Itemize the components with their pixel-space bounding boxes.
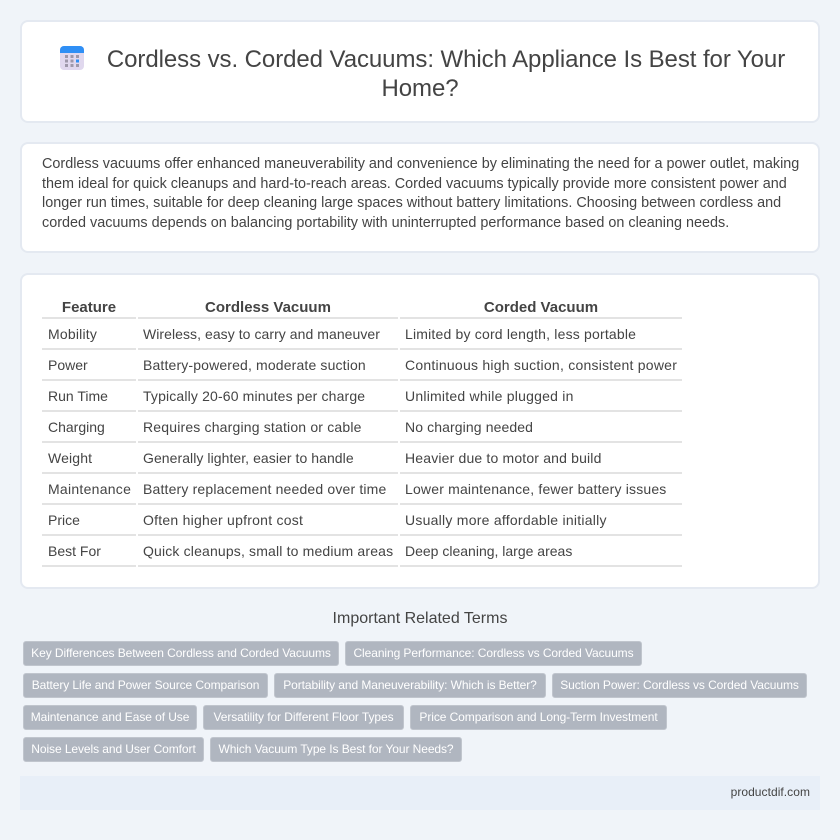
related term tags — [23, 641, 807, 762]
related term tags: Which Vacuum Type Is Best for Your Needs? — [218, 742, 454, 756]
panel: introduction — [20, 142, 820, 253]
table header: Cordless Vacuum — [205, 299, 331, 316]
footer source: productdif.com — [731, 785, 810, 799]
row: price: Often higher upfront cost — [143, 512, 303, 528]
row: charging: Requires charging station or cable — [143, 419, 362, 435]
row: power: Power — [48, 357, 88, 373]
row: weight: Heavier due to motor and build — [405, 450, 602, 466]
row: run time: Unlimited while plugged in — [405, 388, 574, 404]
panel: comparison table — [20, 273, 820, 589]
related term tags: Maintenance and Ease of Use — [31, 710, 189, 724]
row: best for: Deep cleaning, large areas — [405, 543, 572, 559]
row: price: Usually more affordable initially — [405, 512, 607, 528]
intro text: them ideal for quick cleanups and hard-to-reach areas. Corded vacuums typically provide more consistent power and — [42, 176, 787, 192]
row: power — [48, 357, 677, 373]
table header: Feature — [62, 299, 116, 316]
panel: title — [20, 20, 820, 123]
row: weight — [48, 450, 602, 466]
footer bar — [20, 776, 820, 810]
row: charging: No charging needed — [405, 419, 533, 435]
related term tags: Battery Life and Power Source Comparison — [32, 678, 259, 692]
row: best for: Best For — [48, 543, 101, 559]
related term tags: Price Comparison and Long-Term Investment — [419, 710, 658, 724]
heading — [107, 46, 785, 102]
row: charging — [48, 419, 533, 435]
row: mobility: Limited by cord length, less portable — [405, 326, 636, 342]
row: weight: Weight — [48, 450, 92, 466]
row: price: Price — [48, 512, 80, 528]
heading: Home? — [381, 75, 459, 102]
row: price — [48, 512, 607, 528]
row: maintenance: Maintenance — [48, 481, 131, 497]
row: mobility — [48, 326, 636, 342]
row: run time: Run Time — [48, 388, 108, 404]
row: mobility: Wireless, easy to carry and maneuver — [143, 326, 380, 342]
row: weight: Generally lighter, easier to handle — [143, 450, 354, 466]
row: run time — [48, 388, 574, 404]
intro text — [42, 156, 799, 231]
row: charging: Charging — [48, 419, 105, 435]
table header — [62, 299, 598, 316]
row: run time: Typically 20-60 minutes per charge — [143, 388, 365, 404]
row: maintenance — [48, 481, 666, 497]
row: maintenance: Battery replacement needed over time — [143, 481, 386, 497]
heading: Cordless vs. Corded Vacuums: Which Appliance Is Best for Your — [107, 46, 785, 73]
row: maintenance: Lower maintenance, fewer battery issues — [405, 481, 666, 497]
related term tags: Suction Power: Cordless vs Corded Vacuums — [560, 678, 799, 692]
intro text: corded vacuums depends on balancing portability with uninterrupted performance based on cleaning needs. — [42, 215, 729, 231]
row: best for: Quick cleanups, small to medium areas — [143, 543, 393, 559]
row: mobility: Mobility — [48, 326, 97, 342]
icon: calendar — [60, 46, 84, 70]
heading: related terms: Important Related Terms — [333, 610, 507, 627]
related term tags: Portability and Maneuverability: Which is Better? — [283, 678, 537, 692]
related term tags: Key Differences Between Cordless and Corded Vacuums — [31, 646, 331, 660]
related term tags: Versatility for Different Floor Types — [213, 710, 394, 724]
row: best for — [48, 543, 572, 559]
related term tags: Noise Levels and User Comfort — [31, 742, 196, 756]
intro text: longer run times, suitable for deep cleaning large spaces without battery limitations. Choosing between cordless and — [42, 195, 781, 211]
table header: Corded Vacuum — [484, 299, 598, 316]
row: power: Battery-powered, moderate suction — [143, 357, 366, 373]
row: power: Continuous high suction, consistent power — [405, 357, 677, 373]
intro text: Cordless vacuums offer enhanced maneuverability and convenience by eliminating the need for a power outlet, making — [42, 156, 799, 172]
related term tags: Cleaning Performance: Cordless vs Corded Vacuums — [353, 646, 634, 660]
